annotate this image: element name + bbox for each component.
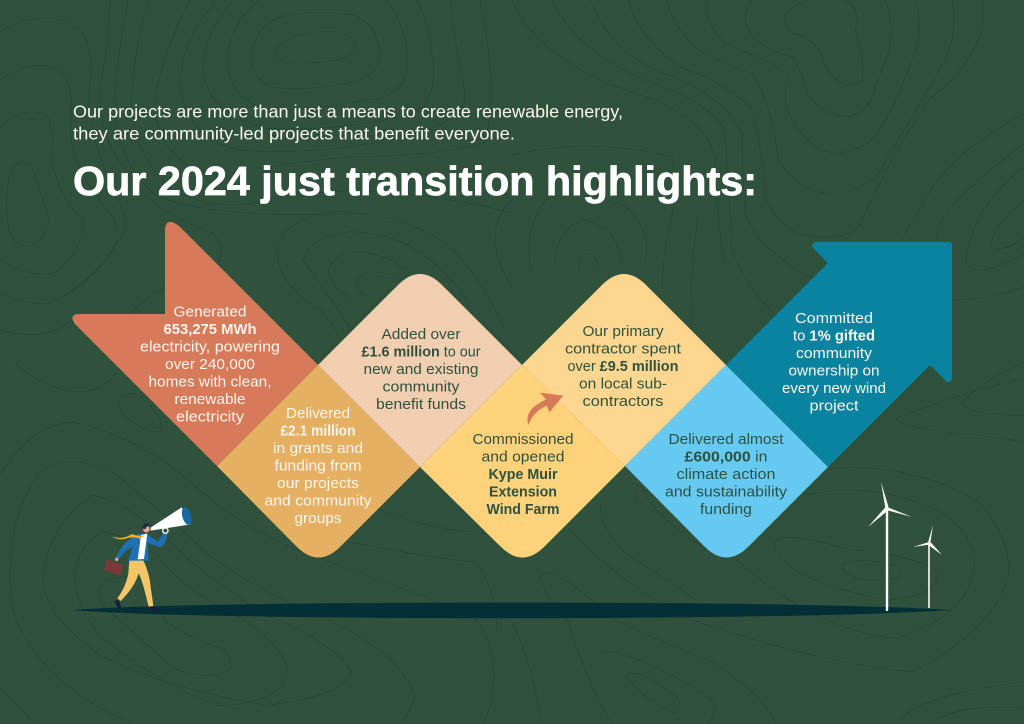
panel: local sub-contractors diamond: contractors xyxy=(582,394,664,410)
icon: small wind turbine xyxy=(913,525,942,608)
panel: Kype Muir diamond: Wind Farm xyxy=(486,502,560,518)
icon: small curved arrow xyxy=(527,393,563,425)
panel: community ownership arrow: Committed xyxy=(795,311,873,327)
panel: Kype Muir diamond: and opened xyxy=(482,450,564,466)
panel: community ownership arrow: project xyxy=(810,398,858,414)
panel: local sub-contractors diamond: Our primary xyxy=(582,324,664,340)
panel: community benefit funds diamond: community xyxy=(382,380,460,396)
panel: Kype Muir diamond: Commissioned xyxy=(472,432,574,448)
panel: Kype Muir diamond xyxy=(420,365,625,558)
panel: Kype Muir diamond: Extension xyxy=(489,484,557,500)
title: Our 2024 just transition highlights: xyxy=(73,158,757,204)
panel: community ownership arrow: every new wind xyxy=(782,381,886,397)
panel: community ownership arrow xyxy=(726,242,952,467)
panel: community ownership arrow: community xyxy=(796,346,873,362)
panel: generated electricity arrow: electricity xyxy=(176,410,245,426)
panel: local sub-contractors diamond: contractor spent xyxy=(565,342,681,358)
panel: community ownership arrow: to 1% gifted xyxy=(793,328,875,344)
icon: large wind turbine xyxy=(868,482,912,611)
panel: generated electricity arrow: renewable xyxy=(174,392,246,408)
panel: grants and funding diamond: groups xyxy=(294,511,342,527)
panel: generated electricity arrow: homes with clean, xyxy=(148,374,272,390)
panel: grants and funding diamond: Delivered xyxy=(286,406,350,422)
panel: community ownership arrow: ownership on xyxy=(788,364,880,380)
panel: climate action funding diamond: Delivered almost xyxy=(668,432,784,448)
panel: local sub-contractors diamond xyxy=(522,274,726,466)
panel: generated electricity arrow: over 240,000 xyxy=(165,357,255,373)
intro text xyxy=(73,102,623,144)
panel: local sub-contractors diamond: over £9.5 million xyxy=(568,359,679,375)
panel: climate action funding diamond: and sustainability xyxy=(665,484,788,500)
panel: community benefit funds diamond: new and existing xyxy=(364,362,478,378)
panel: Kype Muir diamond: Kype Muir xyxy=(488,467,558,483)
panel: climate action funding diamond: £600,000 in xyxy=(684,450,768,466)
intro text: Our projects are more than just a means to create renewable energy, xyxy=(73,102,623,122)
panel: grants and funding diamond xyxy=(217,365,420,558)
panel: climate action funding diamond: climate action xyxy=(676,467,776,483)
panel: climate action funding diamond: funding xyxy=(700,502,752,518)
panel: climate action funding diamond xyxy=(625,365,828,558)
panel: generated electricity arrow: electricity, powering xyxy=(140,340,280,356)
panel: generated electricity arrow xyxy=(72,222,318,466)
panel: grants and funding diamond: in grants and xyxy=(273,441,363,457)
panel: generated electricity arrow: 653,275 MWh xyxy=(164,322,257,338)
icon: person with megaphone xyxy=(104,506,193,611)
ground shadow xyxy=(72,602,951,618)
panel: grants and funding diamond: £2.1 million xyxy=(280,424,356,440)
panel: grants and funding diamond: and community xyxy=(264,494,372,510)
panel: local sub-contractors diamond: on local sub- xyxy=(579,376,667,392)
panel: community benefit funds diamond: £1.6 million to our xyxy=(362,344,481,360)
panel: grants and funding diamond: our projects xyxy=(277,476,359,492)
intro text: they are community-led projects that benefit everyone. xyxy=(73,124,515,144)
panel: grants and funding diamond: funding from xyxy=(274,458,362,474)
panel: community benefit funds diamond: Added over xyxy=(382,327,461,343)
panel: generated electricity arrow: Generated xyxy=(174,304,246,320)
panel: community benefit funds diamond: benefit funds xyxy=(376,397,466,413)
panel: community benefit funds diamond xyxy=(318,274,522,467)
